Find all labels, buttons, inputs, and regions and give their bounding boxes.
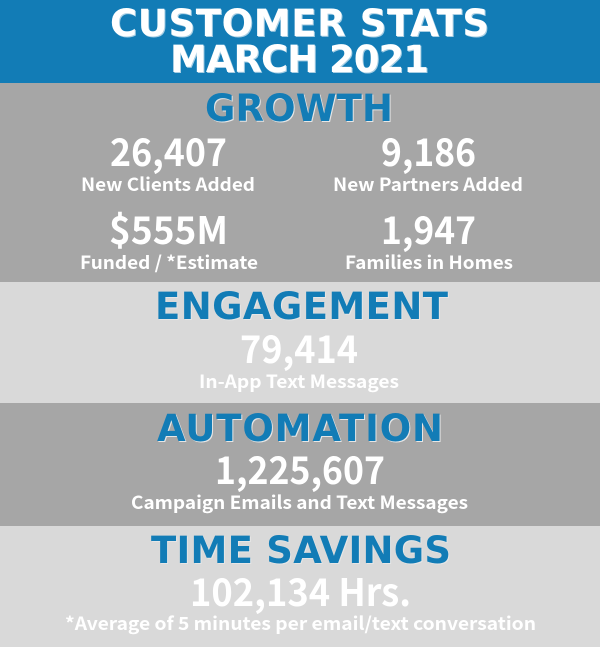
stat: hours saved: *Average of 5 minutes per email/text conversation [65, 610, 536, 636]
panel: time savings [0, 526, 600, 647]
stat: hours saved [65, 562, 536, 636]
title: CUSTOMER STATS [110, 2, 489, 45]
heading: automation: AUTOMATION [157, 407, 443, 450]
heading: engagement: ENGAGEMENT [155, 285, 449, 328]
panel: automation [0, 403, 600, 526]
stat: campaign emails and text messages [131, 440, 468, 515]
stat: families in homes: Families in Homes [345, 249, 513, 275]
panel: growth [0, 83, 600, 282]
heading: growth: GROWTH [205, 87, 393, 130]
stat: campaign emails and text messages: Campaign Emails and Text Messages [131, 489, 468, 515]
stat: new clients added: New Clients Added [81, 171, 255, 197]
stat: funded estimate [80, 200, 258, 275]
stat: new partners added [333, 122, 523, 197]
panel: engagement [0, 282, 600, 403]
title [110, 2, 489, 81]
stat: families in homes [345, 200, 513, 275]
stat: families in homes: 1,947 [381, 200, 476, 255]
stat: new partners added: New Partners Added [333, 171, 523, 197]
stat: in-app text messages: 79,414 [240, 319, 358, 374]
stat: funded estimate: $555M [109, 200, 228, 255]
panel: title header [0, 0, 600, 83]
heading: time savings: TIME SAVINGS [151, 529, 451, 572]
stat: funded estimate: Funded / *Estimate [80, 249, 258, 275]
stat: hours saved: 102,134 Hrs. [190, 562, 411, 617]
stat: new clients added: 26,407 [110, 122, 227, 177]
stat: in-app text messages [199, 319, 399, 394]
stat: new clients added [81, 122, 255, 197]
title: MARCH 2021 [170, 38, 429, 81]
stat: campaign emails and text messages: 1,225,607 [215, 440, 385, 495]
stat: in-app text messages: In-App Text Messages [199, 368, 399, 394]
stat: new partners added: 9,186 [381, 122, 476, 177]
